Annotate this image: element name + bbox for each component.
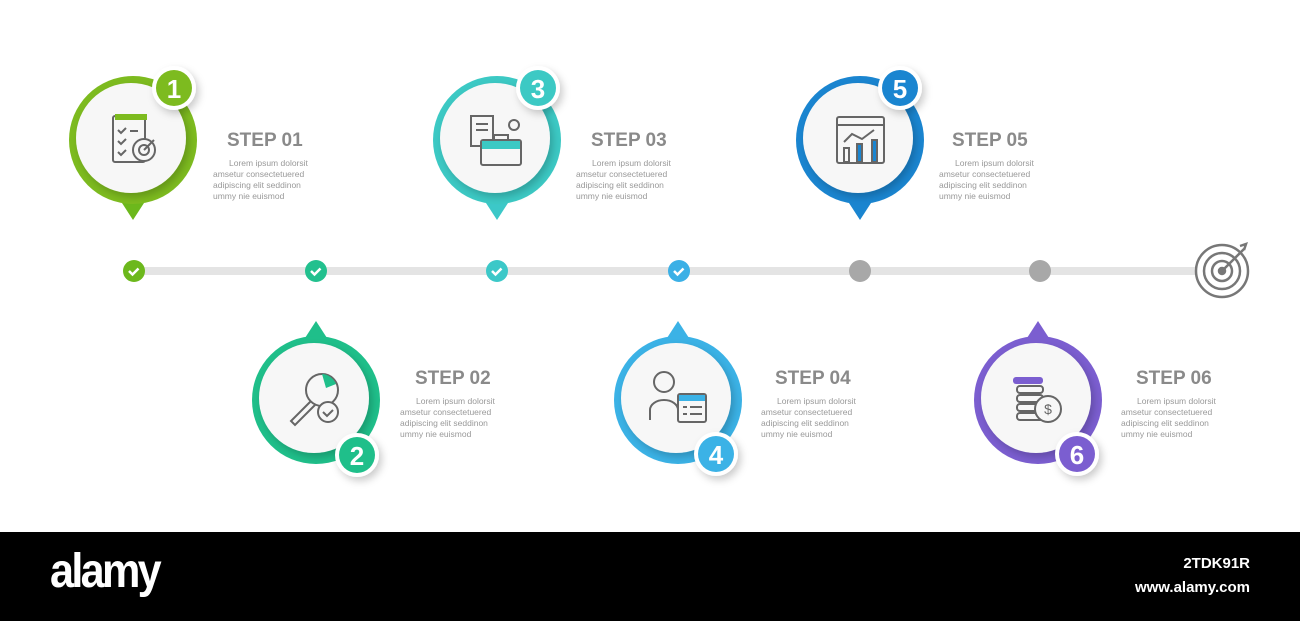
text 6: amsetur consectetuered: [1121, 407, 1212, 417]
badge 1: [152, 66, 196, 110]
dot 5: [849, 260, 871, 282]
badge 3: [516, 66, 560, 110]
badge 2: 2: [350, 441, 364, 471]
text 3: adipiscing elit seddinon: [576, 180, 664, 190]
text 3: amsetur consectetuered: [576, 169, 667, 179]
logo: alamy: [50, 545, 159, 598]
text 2: amsetur consectetuered: [400, 407, 491, 417]
text 2: STEP 02: [415, 368, 491, 389]
step 2: [252, 321, 496, 477]
step 1: [69, 66, 309, 220]
text 1: adipiscing elit seddinon: [213, 180, 301, 190]
text 2: ummy nie euismod: [400, 429, 472, 439]
badge 4: 4: [709, 440, 724, 470]
dot 4: [668, 260, 690, 282]
text 5: Lorem ipsum dolorsit: [955, 158, 1035, 168]
text 5: amsetur consectetuered: [939, 169, 1030, 179]
step 3: [433, 66, 672, 220]
icon: documents briefcase: [471, 116, 521, 165]
footer: [0, 532, 1300, 621]
text 2: Lorem ipsum dolorsit: [416, 396, 496, 406]
text 1: amsetur consectetuered: [213, 169, 304, 179]
text 4: adipiscing elit seddinon: [761, 418, 849, 428]
dot 1: [123, 260, 145, 282]
dot 2: [305, 260, 327, 282]
badge 1: 1: [167, 74, 181, 104]
badge 4: [694, 432, 738, 476]
text 6: STEP 06: [1136, 368, 1212, 389]
icon: target: [1196, 244, 1248, 297]
icon: checklist target: [113, 114, 155, 162]
badge 3: 3: [531, 74, 545, 104]
text 4: amsetur consectetuered: [761, 407, 852, 417]
image id: [1135, 555, 1250, 596]
image id: 2TDK91R: [1183, 555, 1250, 572]
badge 6: 6: [1070, 440, 1084, 470]
text 4: [761, 368, 857, 439]
text 5: [939, 130, 1035, 201]
text 2: adipiscing elit seddinon: [400, 418, 488, 428]
text 6: adipiscing elit seddinon: [1121, 418, 1209, 428]
text 3: Lorem ipsum dolorsit: [592, 158, 672, 168]
text 4: STEP 04: [775, 368, 851, 389]
icon: chart window: [837, 117, 884, 163]
text 2: [400, 368, 496, 439]
text 5: ummy nie euismod: [939, 191, 1011, 201]
badge 2: [335, 433, 379, 477]
text 6: Lorem ipsum dolorsit: [1137, 396, 1217, 406]
text 3: [576, 130, 672, 201]
icon: magnifier check: [291, 374, 338, 425]
badge 6: [1055, 432, 1099, 476]
dot 6: [1029, 260, 1051, 282]
text 6: ummy nie euismod: [1121, 429, 1193, 439]
text 1: ummy nie euismod: [213, 191, 285, 201]
step 6: [974, 321, 1217, 476]
step 5: [796, 66, 1035, 220]
badge 5: [878, 66, 922, 110]
text 4: Lorem ipsum dolorsit: [777, 396, 857, 406]
text 4: ummy nie euismod: [761, 429, 833, 439]
text 5: STEP 05: [952, 130, 1028, 151]
text 5: adipiscing elit seddinon: [939, 180, 1027, 190]
icon: person with list: [650, 372, 706, 422]
text 6: [1121, 368, 1217, 439]
image id: www.alamy.com: [1135, 579, 1250, 596]
step 4: [614, 321, 857, 476]
badge 5: 5: [893, 74, 907, 104]
text 3: STEP 03: [591, 130, 667, 151]
timeline: [123, 244, 1248, 297]
text 1: Lorem ipsum dolorsit: [229, 158, 309, 168]
text 1: STEP 01: [227, 130, 303, 151]
text 3: ummy nie euismod: [576, 191, 648, 201]
dot 3: [486, 260, 508, 282]
icon: coins: $: [1044, 401, 1052, 417]
text 1: [213, 130, 309, 201]
icon: coins: [1013, 377, 1061, 422]
